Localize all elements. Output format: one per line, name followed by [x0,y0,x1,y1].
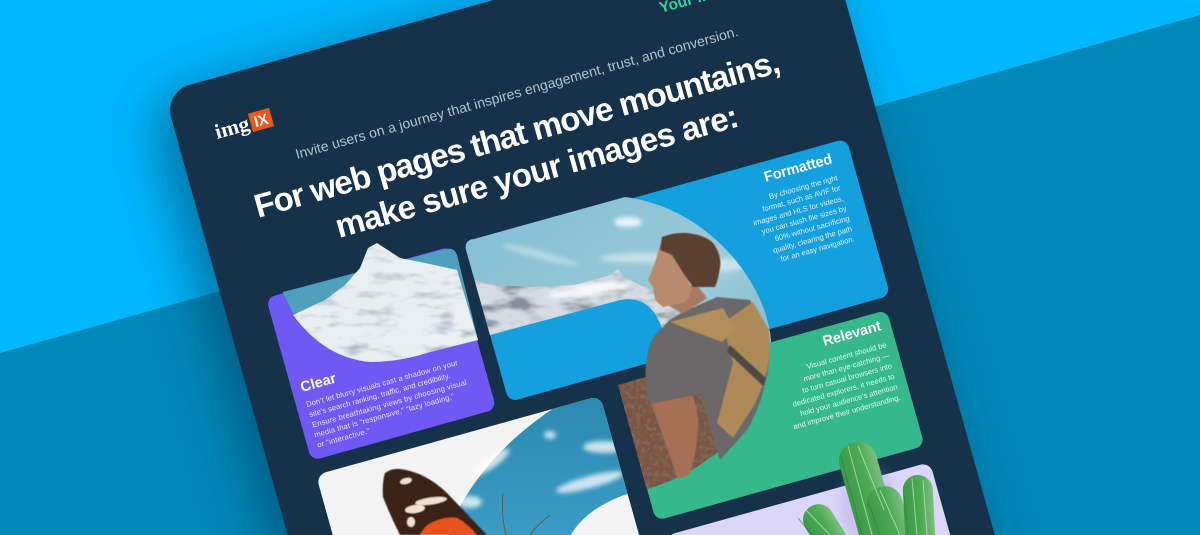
text: Formatted body [752,173,856,263]
text: Formatted body: By choosing the right [768,173,839,201]
text: Formatted body: you can slash file sizes by [761,204,848,236]
text: Relevant body: and improve their understanding. [792,393,902,431]
logo: imgix [212,105,275,144]
text: Formatted body: images and HLS for videos, [752,194,845,228]
subheading: Invite users on a journey that inspires engagement, trust, and conversion. [294,23,740,162]
panel: Formatted [460,139,890,410]
text: Relevant body: dedicated explorers, it needs to [791,372,896,409]
arm [650,390,698,478]
heading: Clear: Clear [299,371,338,396]
text: Clear body: Don’t let blurry visuals cast a shadow on your [305,358,459,409]
snow ridge [548,279,632,300]
text: Formatted body: for an easy navigation. [780,234,856,263]
panel: Clear [266,240,496,461]
text: Formatted body: format, such as AVIF for [761,183,842,214]
title: For web pages that move mountains, [250,43,784,225]
title: make sure your images are: [331,97,743,245]
text: Clear body [305,358,468,449]
panel: Relevant [618,310,925,521]
heading: Formatted: Formatted [762,151,834,186]
icon: cactus [797,438,937,535]
photo: sky and mountains [466,197,772,343]
clouds [458,431,627,508]
icon: butterfly wing [383,469,487,535]
text: Clear body: or “interactive.” [316,426,371,449]
t-shirt [646,297,770,460]
text: Clear body: media that is “responsive,” “lazy loading,” [313,392,456,439]
text: Relevant body: to turn casual browsers into [801,361,893,395]
text: Relevant body: more than eye-catching — [802,351,891,383]
logo: imgix: img [212,111,253,144]
hair [660,233,720,287]
panel: lavender card [671,464,950,535]
text: Formatted body: 60% without sacrificing [774,214,851,243]
photo: brown shrubs [618,377,718,490]
photo: man with backpack [646,233,770,478]
mountain range [475,269,680,335]
text: Clear body: site’s search ranking, traffic, and credibility. [308,371,451,419]
panel: dark document page [164,0,1062,535]
panel: butterfly card [318,398,639,535]
text: Formatted body: quality, clearing the path [772,224,853,255]
text: Relevant body: hold your audience’s attention [799,382,899,418]
icon: snowy mountain [293,243,478,362]
backpack strap [670,308,735,342]
logo: imgix: IX [252,111,270,131]
heading: Relevant: Relevant [821,318,883,350]
butterfly antennae [502,493,550,535]
text: Relevant body: Visual content should be [806,340,888,371]
text: Clear body: Ensure breathtaking views by choosing visual [311,378,468,429]
sky arc [450,398,639,535]
face [648,240,692,307]
neck [665,283,707,314]
text: Relevant body [791,340,902,431]
sky behind mountain [283,248,478,362]
white arc bottom right [570,494,639,535]
backpack [717,302,770,438]
